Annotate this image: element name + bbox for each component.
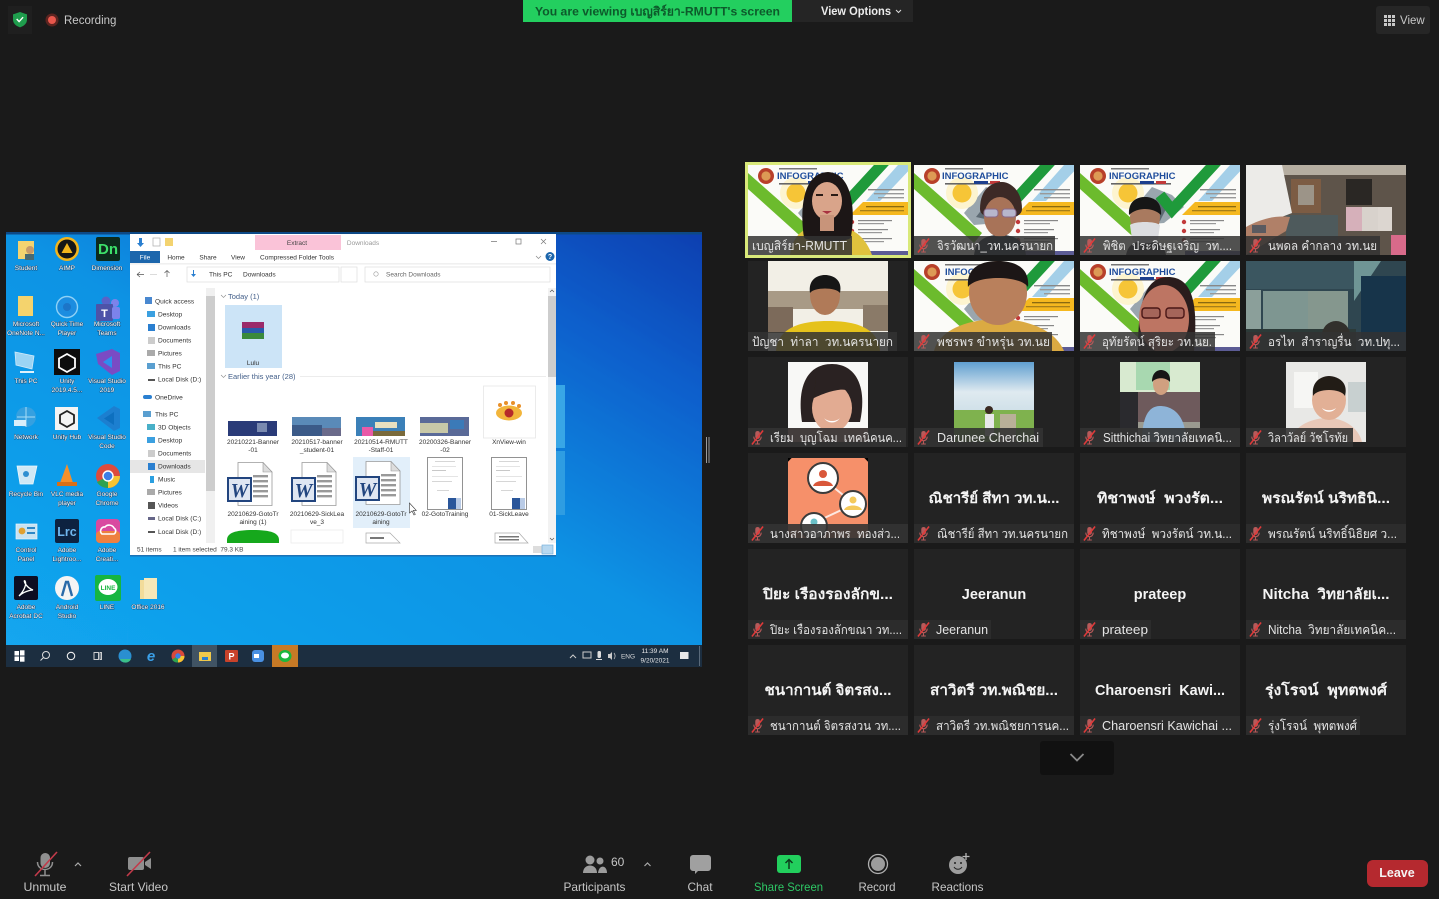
panel: gallery tile พิชิต: INFOGRAPHIC bbox=[1109, 171, 1176, 182]
desktop icon: Recycle Bin bbox=[9, 466, 44, 498]
desktop icon: Microsoft Teams: Microsoft bbox=[94, 321, 120, 328]
name label bbox=[1080, 524, 1240, 543]
name label: วิลาวัลย์ วัชโรทัย bbox=[1268, 430, 1348, 445]
file icon: 20210629-GotoTraining (1) bbox=[227, 462, 279, 526]
panel: gallery tile พชรพร: INFOG bbox=[945, 267, 975, 278]
desktop icon: QuickTime Player: Quick Time bbox=[51, 321, 84, 328]
name label: พชรพร ขำหรุ่น วท.นย bbox=[937, 335, 1050, 350]
toolbar: chat button: Chat bbox=[688, 880, 713, 894]
name label: Nitcha วิทยาลัยเทคนิค... bbox=[1268, 623, 1396, 637]
taskbar icon: powerpoint: P bbox=[228, 652, 235, 662]
toolbar: unmute button: Unmute bbox=[24, 880, 67, 894]
name label: เรียม บุญโฉม เทคนิคนค... bbox=[770, 430, 902, 446]
name label bbox=[914, 620, 991, 639]
explorer navigation pane: OneDrive bbox=[155, 394, 183, 402]
desktop icon: Microsoft OneNote bbox=[7, 296, 45, 337]
desktop icon: Adobe Lightroom Classic: Adobe bbox=[58, 547, 77, 554]
name label: Darunee Cherchai bbox=[937, 431, 1039, 445]
file thumbnail: 20210517-banner_student-01: 20210517-banner bbox=[291, 439, 343, 446]
explorer title bar bbox=[137, 235, 546, 250]
name label: อรไท สำราญรื่น วท.ปทุ... bbox=[1268, 333, 1400, 350]
explorer ribbon tabs bbox=[130, 251, 556, 264]
explorer content: today group: Lulu bbox=[247, 360, 260, 367]
explorer navigation pane: Videos bbox=[158, 502, 179, 510]
desktop icon: This PC bbox=[14, 352, 38, 385]
taskbar icon: file explorer active bbox=[192, 645, 217, 667]
avatar: smiling woman bbox=[788, 364, 868, 442]
desktop icon: Microsoft Teams: T bbox=[101, 308, 108, 320]
explorer navigation pane: Desktop bbox=[158, 438, 183, 444]
file icon: 20210629-SickLeave_3 bbox=[290, 462, 344, 526]
panel: file explorer window bbox=[130, 234, 556, 556]
desktop icon: Unity 2019: Unity bbox=[60, 378, 75, 385]
explorer navigation pane: Local Disk (D:) bbox=[158, 529, 201, 536]
desktop icon: Visual Studio Code: Visual Studio bbox=[88, 434, 126, 441]
panel: gallery tile จิรวัฒนา_วท.นครนายก bbox=[914, 160, 1080, 255]
desktop icon: Control Panel bbox=[16, 524, 37, 563]
name label: รุ่งโรจน์ พุทตพงศ์ bbox=[1268, 718, 1357, 734]
panel: gallery tile นางสาวอาภาพร bbox=[748, 444, 908, 552]
name label: นางสาวอาภาพร ทองส่ว... bbox=[770, 527, 900, 541]
panel: gallery tile Jeeranun bbox=[914, 549, 1074, 639]
recording indicator bbox=[46, 14, 116, 27]
name label: อุทัยรัตน์ สุริยะ วท.นย. bbox=[1102, 335, 1212, 350]
name label bbox=[1246, 428, 1353, 447]
desktop wallpaper bbox=[6, 232, 702, 645]
toolbar: leave button: Leave bbox=[1379, 866, 1415, 880]
explorer title bar: Extract bbox=[287, 240, 307, 247]
toolbar: start video button bbox=[109, 852, 168, 894]
desktop icon: Visual Studio 2019 bbox=[88, 349, 126, 394]
taskbar system tray: ENG bbox=[621, 654, 635, 660]
name label: ทิชาพงษ์ พวงรัตน์ วท.น... bbox=[1102, 527, 1232, 541]
desktop icon: Dimension: Dn bbox=[98, 241, 118, 258]
avatar: man in blue shirt bbox=[1142, 370, 1186, 442]
file thumbnail: 20200326-Banner-02: -02 bbox=[440, 447, 450, 454]
panel: gallery tile Darunee Cherchai bbox=[914, 357, 1074, 447]
name label bbox=[1246, 236, 1380, 255]
name label bbox=[1246, 524, 1406, 543]
panel: gallery tile อุทัยรัตน์: INFOGRAPHIC bbox=[1109, 267, 1176, 278]
panel: gallery tile ณิชารีย์ bbox=[914, 453, 1074, 543]
desktop icon: VLC media player: player bbox=[58, 500, 77, 507]
panel: gallery tile Nitcha bbox=[1246, 549, 1406, 639]
desktop icon: VLC media player bbox=[51, 464, 83, 507]
taskbar system tray: 11:39 AM bbox=[642, 648, 668, 655]
explorer navigation pane: Desktop bbox=[158, 312, 183, 318]
name label bbox=[1246, 332, 1406, 351]
panel: gallery tile prateep: prateep bbox=[1134, 587, 1186, 603]
file thumbnail: 20200326-Banner-02: 20200326-Banner bbox=[419, 439, 472, 446]
desktop icon: Android Studio bbox=[55, 576, 79, 620]
name label: จิรวัฒนา_วท.นครนายก bbox=[937, 239, 1053, 253]
file icons: partially visible row bbox=[227, 530, 528, 543]
file icon: 01-SickLeave: 01-SickLeave bbox=[489, 511, 529, 518]
desktop icon: Adobe Acrobat DC: Acrobat DC bbox=[9, 613, 43, 620]
panel: gallery tile พรณรัตน์: พรณรัตน์ นริทธินิ... bbox=[1262, 489, 1390, 507]
view options button: View Options bbox=[821, 6, 891, 18]
panel: gallery tile ชนากานต์: ชนากานต์ จิตรสง... bbox=[764, 681, 892, 699]
explorer content: today group bbox=[221, 292, 282, 368]
panel: gallery tile Sitthichai bbox=[1080, 357, 1240, 447]
toolbar: audio options caret bbox=[75, 863, 81, 866]
file thumbnail: 20210517-banner_student-01: _student-01 bbox=[299, 447, 335, 454]
panel: gallery tile ปัญชา bbox=[748, 261, 908, 351]
explorer navigation pane: This PC bbox=[155, 412, 179, 418]
view layout button bbox=[1376, 6, 1430, 34]
desktop icon: VLC media player: VLC media bbox=[51, 491, 83, 498]
explorer navigation pane: Documents bbox=[158, 450, 192, 458]
desktop icon: Student bbox=[15, 241, 37, 272]
panel: gallery tile รุ่งโรจน์: รุ่งโรจน์ พุทตพงศ์ bbox=[1265, 681, 1388, 699]
file icon: 20210629-SickLeave_3: 20210629-SickLea bbox=[290, 511, 344, 518]
desktop icon: Student: Student bbox=[15, 265, 37, 272]
explorer status bar: 1 item selected 79.3 KB bbox=[173, 546, 243, 554]
desktop icon: Office 2016 bbox=[131, 578, 165, 611]
taskbar icon: task view bbox=[94, 652, 102, 660]
file thumbnail: 20210514-RMUTT-Staff-01: 20210514-RMUTT bbox=[354, 439, 408, 446]
explorer address bar: Downloads bbox=[243, 272, 276, 278]
desktop icon: Unity 2019 bbox=[52, 349, 83, 394]
toolbar: participants button bbox=[564, 855, 626, 894]
desktop icon: Visual Studio Code: Code bbox=[99, 443, 115, 450]
screen share banner bbox=[523, 0, 792, 22]
person: man in yellow shirt bbox=[776, 275, 880, 351]
explorer address bar: This PC bbox=[209, 272, 233, 278]
name label bbox=[1080, 716, 1240, 735]
screen share banner: You are viewing เบญสิร์ยา-RMUTT's screen bbox=[535, 4, 780, 18]
person: top of head bbox=[1322, 321, 1350, 349]
translucent window edge bbox=[556, 385, 565, 515]
taskbar icon: zoom bbox=[252, 650, 264, 662]
desktop icon: Adobe Creative Cloud: Adobe bbox=[98, 547, 117, 554]
file thumbnail: XnView-win bbox=[484, 386, 536, 446]
explorer status bar: 51 items bbox=[137, 546, 162, 554]
panel: gallery tile เบญสิร์ยา-RMUTT (active speaker): INFOGRAPHIC bbox=[777, 171, 844, 182]
desktop icon: Recycle Bin: Recycle Bin bbox=[9, 491, 44, 498]
name label: ปิยะ เรืองรองลักขณา วท.... bbox=[770, 623, 902, 637]
name label: พิชิต ประดิษฐเจริญ วท.... bbox=[1103, 239, 1232, 253]
desktop icon: Microsoft OneNote: Microsoft bbox=[13, 321, 39, 328]
name label bbox=[914, 716, 1074, 735]
panel: gallery tile Charoensri: Charoensri Kawi... bbox=[1095, 683, 1225, 699]
panel: gallery tile สาวิตรี: สาวิตรี วท.พณิชย... bbox=[930, 682, 1058, 699]
name label: ชนากานต์ จิตรสงวน วท.... bbox=[770, 719, 901, 733]
desktop icon: QuickTime Player bbox=[51, 296, 84, 337]
name label: Jeeranun bbox=[936, 623, 988, 637]
file thumbnail: 20210514-RMUTT-Staff-01 bbox=[354, 417, 408, 454]
avatar: smiling woman bbox=[1290, 376, 1362, 442]
file thumbnail: 20210221-Banner-01: 20210221-Banner bbox=[227, 439, 280, 446]
explorer address bar: Search Downloads bbox=[386, 272, 441, 278]
name label bbox=[748, 716, 908, 735]
name label bbox=[914, 428, 1043, 447]
taskbar icon: edge bbox=[118, 650, 132, 663]
desktop icon: Microsoft OneNote: OneNote N... bbox=[7, 330, 45, 337]
toolbar: participants button: 60 bbox=[611, 855, 625, 869]
file icon: 20210629-GotoTraining selected bbox=[353, 457, 410, 528]
toolbar: leave button bbox=[1367, 860, 1428, 887]
panel: gallery tile Charoensri bbox=[1080, 645, 1240, 735]
desktop icon: Adobe Creative Cloud bbox=[96, 519, 120, 563]
explorer content: today group: Today (1) bbox=[228, 292, 260, 301]
person: woman in mustard shirt bbox=[934, 261, 1064, 351]
desktop icon: Control Panel: Panel bbox=[18, 556, 35, 563]
toolbar: reactions button bbox=[932, 853, 984, 894]
desktop icon: LINE: LINE bbox=[100, 604, 115, 611]
taskbar icon: line flashing bbox=[272, 645, 298, 667]
file thumbnail: 20210514-RMUTT-Staff-01: -Staff-01 bbox=[369, 447, 394, 454]
name label bbox=[748, 620, 908, 639]
taskbar system tray: 9/20/2021 bbox=[641, 658, 670, 664]
file thumbnail: 20210221-Banner-01: -01 bbox=[248, 447, 258, 454]
panel: gallery tile Jeeranun: Jeeranun bbox=[962, 587, 1026, 603]
desktop icon: Android Studio: Android bbox=[56, 604, 79, 611]
explorer ribbon tabs: Compressed Folder Tools bbox=[260, 254, 335, 262]
person: woman in yellow jacket bbox=[790, 172, 872, 255]
split divider handle bbox=[706, 437, 709, 463]
desktop icon: Visual Studio Code bbox=[88, 406, 126, 450]
person: woman with glasses bbox=[974, 182, 1026, 255]
taskbar icon: start bbox=[14, 650, 24, 662]
file icon: 20210629-GotoTraining selected: 20210629-GotoTr bbox=[355, 511, 407, 518]
explorer address bar bbox=[137, 267, 550, 282]
view layout button: View bbox=[1400, 15, 1425, 27]
toolbar: chat button bbox=[688, 855, 713, 894]
desktop icon: Unity Hub bbox=[53, 407, 82, 441]
name label: นพดล คำกลาง วท.นย bbox=[1268, 239, 1377, 253]
file thumbnail: XnView-win: XnView-win bbox=[492, 439, 526, 446]
name label bbox=[1080, 332, 1215, 351]
explorer navigation pane: This PC bbox=[158, 364, 182, 370]
file thumbnail: 20200326-Banner-02 bbox=[419, 417, 472, 454]
person: woman with red glasses bbox=[1138, 277, 1195, 353]
desktop icon: Google Chrome: Google bbox=[97, 491, 118, 498]
file icon: 20210629-GotoTraining (1): aining (1) bbox=[239, 519, 267, 526]
file icon: 20210629-GotoTraining (1): 20210629-GotoTr bbox=[227, 511, 279, 518]
file icon: 01-SickLeave bbox=[489, 458, 529, 518]
desktop icon: AIMP bbox=[55, 237, 79, 272]
name label bbox=[914, 332, 1052, 351]
explorer navigation pane: Local Disk (D:) bbox=[158, 376, 201, 384]
panel: gallery tile เบญสิร์ยา-RMUTT (active speaker) bbox=[745, 160, 914, 258]
mouse cursor bbox=[410, 503, 416, 515]
toolbar: unmute button bbox=[24, 852, 67, 894]
desktop icon: Network bbox=[14, 407, 39, 441]
explorer navigation pane: Downloads bbox=[158, 464, 191, 470]
explorer status bar bbox=[137, 545, 553, 554]
person: man with mask bbox=[1126, 197, 1166, 255]
desktop icon: This PC: This PC bbox=[14, 378, 38, 385]
desktop icon: Google Chrome bbox=[95, 464, 120, 507]
explorer ribbon tabs: Home bbox=[167, 254, 185, 262]
name label bbox=[1080, 620, 1151, 639]
panel: gallery tile ทิชาพงษ์: ทิชาพงษ์ พวงรัต... bbox=[1097, 489, 1223, 507]
taskbar icon: cortana bbox=[67, 652, 75, 660]
explorer navigation pane: 3D Objects bbox=[158, 424, 191, 432]
desktop icon: Unity 2019: 2019.4.5... bbox=[52, 387, 83, 394]
panel: gallery tile ปิยะ bbox=[748, 549, 908, 639]
desktop icon: AIMP: AIMP bbox=[59, 265, 75, 272]
panel: gallery tile จิรวัฒนา_วท.นครนายก: INFOGRAPHIC bbox=[942, 171, 1009, 182]
desktop icon: Visual Studio 2019: Visual Studio bbox=[88, 378, 126, 385]
toolbar: participants caret bbox=[644, 863, 650, 866]
name label bbox=[914, 524, 1074, 543]
panel: gallery tile รุ่งโรจน์ bbox=[1246, 645, 1406, 735]
name label: ปัญชา ท่าลา วท.นครนายก bbox=[752, 335, 893, 349]
toolbar: reactions button: Reactions bbox=[932, 880, 984, 894]
desktop icon: Adobe Lightroom Classic: Lightroo... bbox=[53, 556, 82, 563]
file icon: 20210629-GotoTraining selected: aining bbox=[372, 519, 390, 526]
name label bbox=[1080, 236, 1240, 255]
person: arm and white shirt bbox=[1246, 165, 1292, 255]
avatar: network of people bbox=[801, 463, 866, 539]
explorer scrollbar bbox=[548, 288, 556, 543]
name label bbox=[914, 236, 1055, 255]
taskbar system tray bbox=[570, 646, 700, 666]
desktop icon: Network: Network bbox=[14, 434, 39, 441]
name label: ณิชารีย์ สีทา วท.นครนายก bbox=[937, 527, 1068, 541]
toolbar: record button bbox=[858, 854, 896, 894]
name label bbox=[748, 524, 908, 543]
toolbar: start video button: Start Video bbox=[109, 880, 168, 894]
explorer navigation pane: Local Disk (C:) bbox=[158, 516, 201, 522]
desktop icon: LINE: LINE bbox=[101, 585, 116, 592]
avatar: woman in rice field bbox=[985, 406, 994, 436]
desktop icon: Microsoft Teams: Teams bbox=[97, 330, 117, 337]
panel: gallery tile อุทัยรัตน์ bbox=[1080, 256, 1246, 353]
desktop icon: Office 2016: Office 2016 bbox=[131, 604, 165, 611]
panel: gallery tile พรณรัตน์ bbox=[1246, 453, 1406, 543]
panel: gallery tile เรียม bbox=[748, 357, 908, 447]
taskbar icon: chrome bbox=[172, 650, 184, 663]
panel: shared screen bbox=[6, 232, 702, 667]
explorer content: earlier this year group: Earlier this year (28) bbox=[228, 372, 296, 381]
name label: สาวิตรี วท.พณิชยการนค... bbox=[936, 719, 1069, 733]
explorer title bar: Downloads bbox=[347, 240, 380, 247]
explorer ribbon tabs: ? bbox=[548, 254, 552, 261]
panel: gallery tile Nitcha: Nitcha วิทยาลัยเ... bbox=[1262, 586, 1390, 603]
toolbar: share screen button: Share Screen bbox=[754, 880, 823, 894]
explorer navigation pane: Pictures bbox=[158, 350, 183, 358]
file thumbnail: 20210221-Banner-01 bbox=[227, 421, 280, 454]
desktop icon: Control Panel: Control bbox=[16, 547, 37, 554]
desktop icon: Adobe Lightroom Classic: Lrc bbox=[57, 525, 77, 539]
desktop icon: Dimension: Dimension bbox=[92, 265, 123, 272]
name label bbox=[1080, 428, 1240, 447]
view options button bbox=[792, 0, 913, 22]
panel: gallery tile ทิชาพงษ์ bbox=[1080, 453, 1240, 543]
toolbar: record button: Record bbox=[858, 880, 896, 894]
file thumbnail: 20210517-banner_student-01 bbox=[291, 417, 343, 454]
name label bbox=[1246, 620, 1406, 639]
panel: gallery tile พิชิต bbox=[1080, 160, 1246, 255]
name label: เบญสิร์ยา-RMUTT bbox=[752, 239, 847, 253]
desktop icon: Adobe Lightroom Classic bbox=[53, 519, 82, 563]
taskbar icon: powerpoint bbox=[225, 650, 238, 662]
explorer ribbon tabs: Share bbox=[199, 254, 217, 262]
explorer navigation pane: Downloads bbox=[158, 324, 191, 332]
desktop icon: Android Studio: Studio bbox=[58, 613, 77, 620]
explorer navigation pane: Documents bbox=[158, 338, 192, 344]
explorer navigation pane: Pictures bbox=[158, 490, 183, 496]
file icon: 02-GotoTraining bbox=[422, 458, 469, 518]
panel: gallery tile ปิยะ: ปิยะ เรืองรองลักข... bbox=[762, 586, 893, 603]
panel: gallery tile นพดล bbox=[1246, 165, 1406, 255]
desktop icon: Unity Hub: Unity Hub bbox=[53, 434, 82, 441]
panel: gallery tile พชรพร bbox=[914, 256, 1080, 351]
explorer ribbon tabs: View bbox=[231, 254, 245, 262]
taskbar icon: internet explorer: e bbox=[147, 648, 155, 665]
desktop icon: QuickTime Player: Player bbox=[58, 330, 77, 337]
desktop icon: Adobe Acrobat DC bbox=[9, 576, 43, 620]
desktop icon: Dimension bbox=[92, 237, 123, 272]
name label: Sitthichai วิทยาลัยเทคนิ... bbox=[1103, 431, 1232, 445]
name label bbox=[1246, 716, 1360, 735]
desktop icon: Microsoft Teams bbox=[94, 296, 120, 337]
taskbar bbox=[6, 645, 702, 667]
toolbar: share screen button bbox=[754, 855, 823, 894]
top status: security shield bbox=[8, 6, 32, 34]
taskbar icon: search bbox=[40, 652, 50, 660]
explorer navigation pane: Music bbox=[158, 476, 176, 484]
panel: gallery tile วิลาวัลย์ bbox=[1246, 357, 1406, 447]
explorer navigation pane bbox=[130, 288, 215, 543]
name label: Charoensri Kawichai ... bbox=[1102, 719, 1232, 733]
file icon: 02-GotoTraining: 02-GotoTraining bbox=[422, 511, 469, 518]
desktop icon: Adobe Creative Cloud: Creati... bbox=[96, 556, 119, 563]
name label bbox=[748, 332, 897, 351]
desktop icon: Visual Studio 2019: 2019 bbox=[100, 387, 115, 394]
panel: gallery tile สาวิตรี bbox=[914, 645, 1074, 735]
recording indicator: Recording bbox=[64, 15, 116, 27]
desktop icon: Google Chrome: Chrome bbox=[95, 500, 119, 507]
panel: gallery tile ชนากานต์ bbox=[748, 645, 908, 735]
desktop icon: Adobe Acrobat DC: Adobe bbox=[17, 604, 36, 611]
panel: gallery tile prateep bbox=[1080, 549, 1240, 639]
panel: gallery tile ณิชารีย์: ณิชารีย์ สีทา วท.น... bbox=[928, 489, 1060, 507]
desktop icon: LINE bbox=[95, 575, 121, 611]
name label: prateep bbox=[1102, 623, 1148, 637]
file icon: 20210629-SickLeave_3: ve_3 bbox=[310, 519, 324, 526]
explorer ribbon tabs: File bbox=[140, 254, 151, 262]
explorer navigation pane: Quick access bbox=[155, 298, 195, 306]
toolbar: participants button: Participants bbox=[564, 880, 626, 894]
next page chevron button bbox=[1040, 741, 1114, 775]
name label: พรณรัตน์ นริทธิ์นิธิยศ ว... bbox=[1268, 524, 1397, 541]
panel: gallery tile อรไท bbox=[1246, 261, 1406, 351]
name label bbox=[748, 428, 906, 447]
